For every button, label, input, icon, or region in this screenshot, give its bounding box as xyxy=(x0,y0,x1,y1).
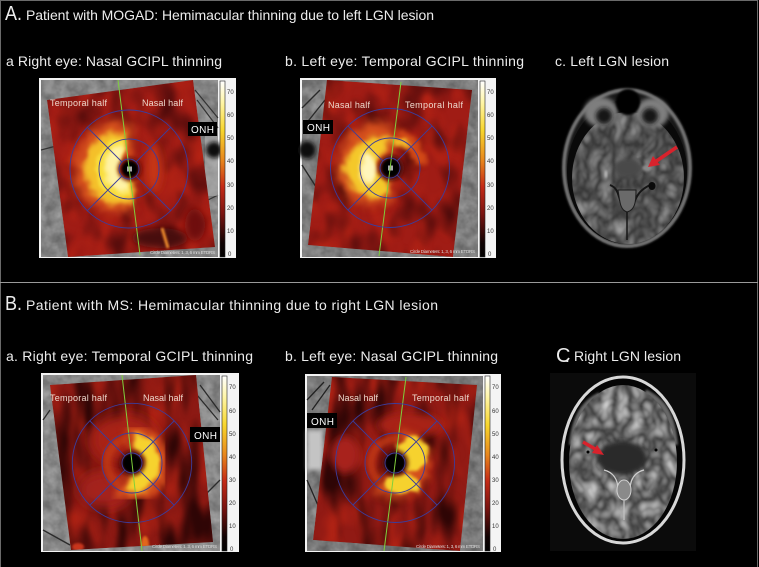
colour scale: 50 xyxy=(487,136,494,142)
ONH label: ONH xyxy=(307,123,330,134)
half labels: Temporal half xyxy=(405,100,463,110)
half labels xyxy=(338,393,469,403)
colour scale: 40 xyxy=(487,159,494,165)
colour scale: 60 xyxy=(492,409,499,415)
colour scale xyxy=(485,376,499,553)
panel: B b left eye OCT heat map xyxy=(305,374,501,553)
half labels: Nasal half xyxy=(328,100,370,110)
caption: panel B b: b. Left eye: Nasal GCIPL thinning xyxy=(285,348,498,364)
caption: panel A a: a Right eye: Nasal GCIPL thinning xyxy=(6,53,222,69)
colour scale: 50 xyxy=(492,432,499,438)
colour scale: 0 xyxy=(493,547,497,553)
colour scale: 10 xyxy=(227,229,234,235)
circle diameter note: Circle Diameters: 1, 3, 6 mm ETDRS xyxy=(152,544,217,549)
colour scale xyxy=(220,81,234,258)
ONH label: ONH xyxy=(194,431,217,442)
ONH label xyxy=(303,120,333,134)
colour scale: 20 xyxy=(229,501,236,507)
half labels xyxy=(50,393,183,403)
ETDRS grid xyxy=(72,403,192,523)
caption: panel B c: Right LGN lesion xyxy=(574,348,681,364)
colour scale: 70 xyxy=(229,385,236,391)
section B heading xyxy=(5,293,438,315)
caption: panel B c xyxy=(556,345,681,367)
colour scale: 30 xyxy=(487,183,494,189)
colour scale: 60 xyxy=(487,113,494,119)
panel: B c right LGN lesion MRI xyxy=(550,373,696,551)
colour scale: 50 xyxy=(229,432,236,438)
ONH label xyxy=(307,413,337,428)
brain tissue xyxy=(568,384,678,540)
green scan line xyxy=(122,375,142,551)
colour scale: 70 xyxy=(227,90,234,96)
orbits xyxy=(584,89,669,128)
half labels: Temporal half xyxy=(412,393,469,403)
green scan line xyxy=(384,377,406,551)
panel: A b left eye OCT heat map xyxy=(298,78,496,258)
circle diameter note: Circle Diameters: 1, 3, 6 mm ETDRS xyxy=(410,249,475,254)
colour scale: 20 xyxy=(492,501,499,507)
colour scale: 30 xyxy=(227,183,234,189)
panel: B a right eye OCT heat map xyxy=(41,373,239,554)
half labels: Nasal half xyxy=(142,98,183,108)
colour scale: 30 xyxy=(492,478,499,484)
ONH label xyxy=(188,122,217,136)
colour scale: 70 xyxy=(492,385,499,391)
half labels: Temporal half xyxy=(50,98,107,108)
half labels: Nasal half xyxy=(143,393,183,403)
caption: panel B c: C. xyxy=(556,345,570,367)
ONH label xyxy=(190,427,220,442)
arrow: red lesion pointer xyxy=(648,147,677,167)
colour scale: 20 xyxy=(227,206,234,212)
arrow: red lesion pointer xyxy=(583,442,604,455)
half labels xyxy=(328,100,463,110)
colour scale: 40 xyxy=(229,455,236,461)
panel: A c left LGN lesion MRI xyxy=(562,88,692,248)
section A heading xyxy=(5,3,434,25)
circle diameter note: Circle Diameters: 1, 3, 6 mm ETDRS xyxy=(416,544,480,549)
ONH label: ONH xyxy=(191,125,214,136)
colour scale: 0 xyxy=(228,252,232,258)
circle diameter note: Circle Diameters: 1, 3, 6 mm ETDRS xyxy=(150,250,215,255)
colour scale: 60 xyxy=(229,409,236,415)
colour scale: 50 xyxy=(227,136,234,142)
half labels: Nasal half xyxy=(338,393,378,403)
ETDRS grid xyxy=(70,110,188,228)
colour scale: 10 xyxy=(487,229,494,235)
colour scale: 10 xyxy=(492,524,499,530)
section B heading: B. xyxy=(5,293,22,315)
half labels xyxy=(50,98,183,108)
divider xyxy=(0,282,758,283)
colour scale: 40 xyxy=(227,159,234,165)
section B heading: Patient with MS: Hemimacular thinning due to right LGN lesion xyxy=(26,297,438,313)
colour scale xyxy=(480,81,494,258)
colour scale: 30 xyxy=(229,478,236,484)
brain tissue xyxy=(570,110,686,246)
ONH label: ONH xyxy=(311,417,334,428)
green scan line xyxy=(118,80,140,255)
colour scale: 40 xyxy=(492,455,499,461)
ETDRS grid xyxy=(336,404,454,522)
colour scale: 0 xyxy=(230,547,234,553)
caption: panel B a: a. Right eye: Temporal GCIPL thinning xyxy=(6,348,253,364)
head outline xyxy=(562,88,692,248)
half labels: Temporal half xyxy=(50,393,107,403)
section A heading: A. xyxy=(5,3,22,25)
colour scale: 20 xyxy=(487,206,494,212)
colour scale xyxy=(222,376,236,553)
ETDRS grid xyxy=(330,108,450,228)
caption: panel A b: b. Left eye: Temporal GCIPL thinning xyxy=(285,53,524,69)
colour scale: 10 xyxy=(229,524,236,530)
colour scale: 70 xyxy=(487,90,494,96)
panel: A a right eye OCT heat map xyxy=(39,78,236,258)
green scan line xyxy=(379,82,401,256)
caption: panel A c: c. Left LGN lesion xyxy=(555,53,669,69)
section A heading: Patient with MOGAD: Hemimacular thinning due to left LGN lesion xyxy=(26,7,434,23)
colour scale: 60 xyxy=(227,113,234,119)
skull ring xyxy=(562,377,684,543)
colour scale: 0 xyxy=(488,252,492,258)
